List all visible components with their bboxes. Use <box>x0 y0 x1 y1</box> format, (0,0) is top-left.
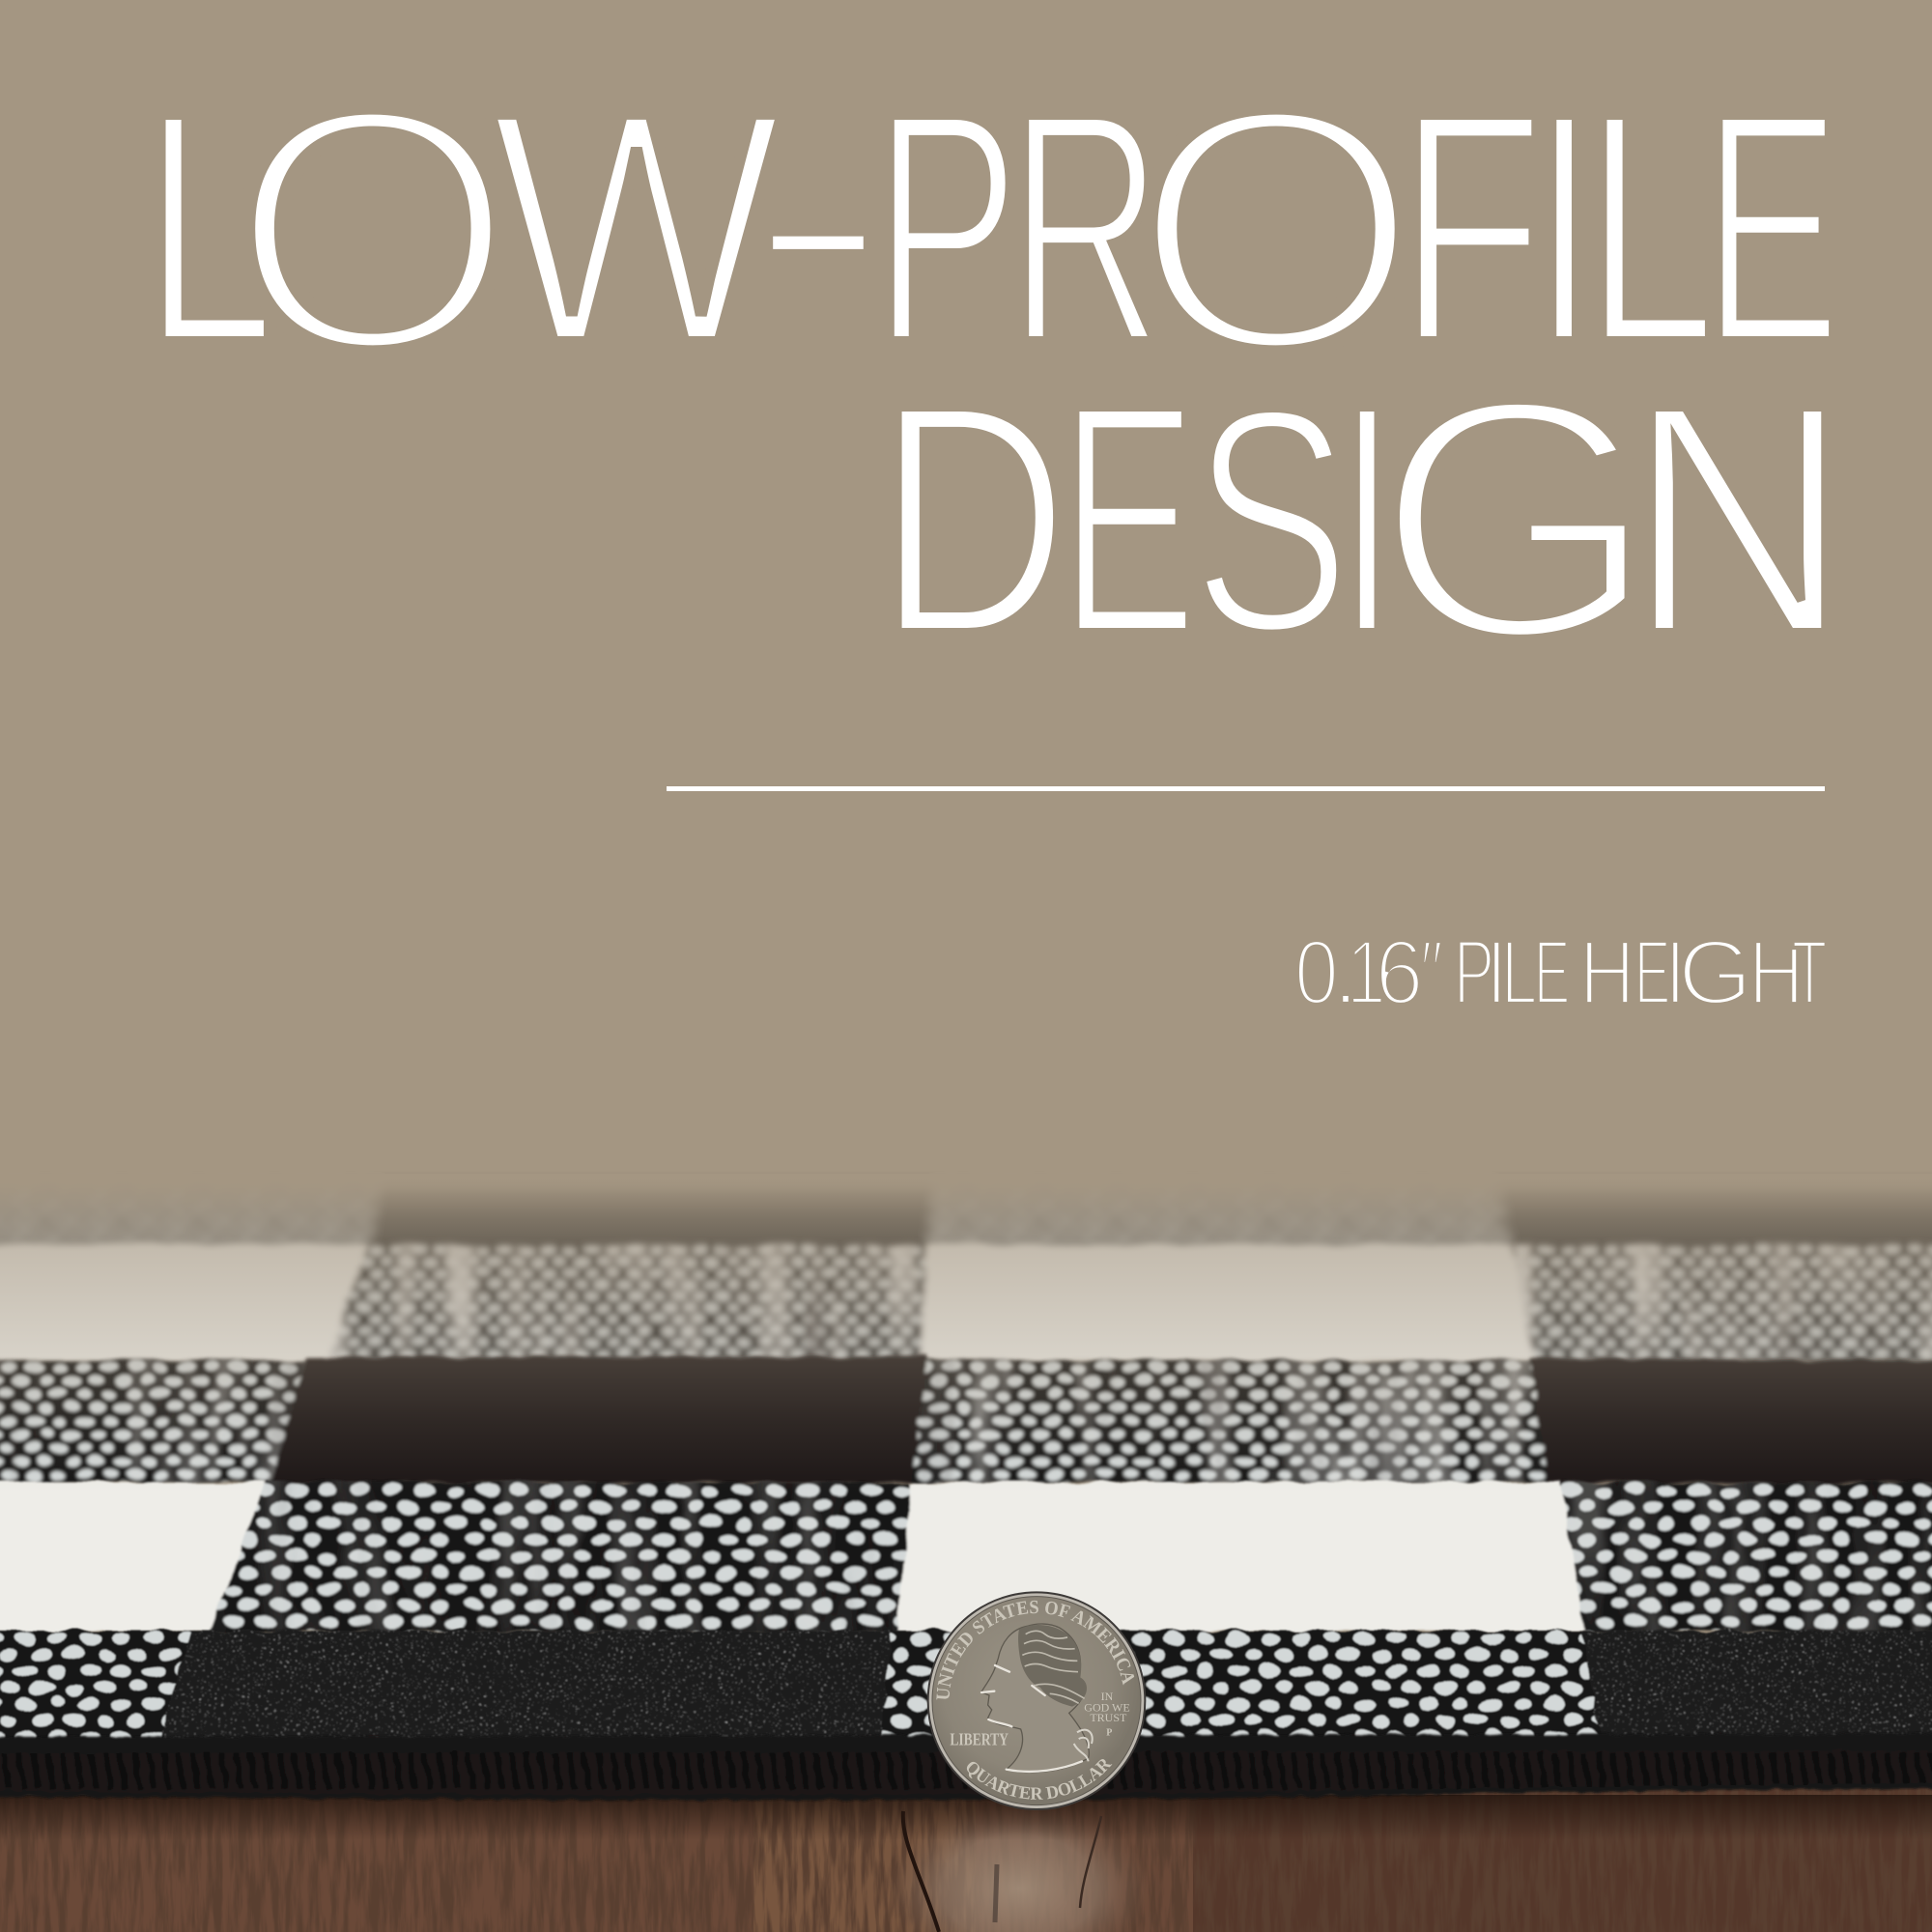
title line one: W <box>489 42 783 412</box>
rug row 3: white and check squares <box>0 1482 1932 1633</box>
subtitle: pile height: . <box>1331 923 1360 1024</box>
title line two: I <box>1337 336 1397 702</box>
rug row 0: far blurred checks <box>0 1184 1932 1256</box>
coin legend: IN <box>1101 1690 1114 1703</box>
coin legend: LIBERTY <box>950 1730 1009 1749</box>
title line one: E <box>1703 44 1840 411</box>
subtitle: pile height: E <box>1634 923 1671 1024</box>
title line two: D <box>876 336 1069 702</box>
title line one: - <box>749 80 888 364</box>
coin legend: P <box>1106 1728 1112 1739</box>
title line one: L <box>143 44 274 411</box>
wood floor <box>0 1777 1932 1932</box>
coin legend <box>936 1600 1134 1800</box>
subtitle: pile height: T <box>1792 923 1828 1024</box>
title line two: S <box>1192 342 1350 698</box>
rug row 2: check and dark squares <box>0 1356 1932 1484</box>
subtitle: pile height: G <box>1678 923 1753 1024</box>
coin legend: TRUST <box>1090 1711 1127 1724</box>
rug row 4: check and dark squares <box>0 1631 1932 1743</box>
title line two <box>876 327 1851 710</box>
title line one: R <box>1009 44 1163 411</box>
subtitle: pile height: H <box>1748 923 1804 1024</box>
haze fading the rug into the background <box>0 1174 1932 1492</box>
divider rule <box>667 786 1825 791</box>
coin legend: QUARTER DOLLAR <box>966 1759 1113 1800</box>
subtitle: pile height: 0 <box>1294 923 1339 1024</box>
title line one <box>143 36 1840 635</box>
coin legend: UNITED STATES OF AMERICA <box>936 1600 1134 1700</box>
title line one: I <box>1532 44 1597 411</box>
subtitle: pile height: ″ <box>1420 923 1443 1024</box>
title line one: L <box>1584 44 1716 411</box>
title line two: N <box>1626 336 1851 702</box>
subtitle: pile height: H <box>1579 923 1634 1024</box>
title line one: P <box>873 44 1020 411</box>
subtitle: pile height: E <box>1534 923 1571 1024</box>
subtitle: pile height <box>1294 923 1828 1024</box>
subtitle: pile height: I <box>1486 923 1507 1024</box>
subtitle: pile height: 6 <box>1376 923 1424 1024</box>
subtitle: pile height: P <box>1454 923 1494 1024</box>
title line one: O <box>1132 36 1421 423</box>
icon: quarter dollar coin <box>927 1591 1146 1810</box>
coin portrait <box>981 1624 1093 1773</box>
title line one: O <box>230 36 516 423</box>
title line two: G <box>1375 327 1659 710</box>
subtitle: pile height: I <box>1664 923 1686 1024</box>
coin legend: GOD WE <box>1084 1700 1130 1714</box>
rug bound edge <box>0 1734 1932 1800</box>
subtitle: pile height: 1 <box>1347 923 1386 1024</box>
subtitle: pile height: L <box>1501 923 1537 1024</box>
title line one: F <box>1398 44 1545 411</box>
title: LOW-PROFILE DESIGN <box>143 36 1851 710</box>
title line two: E <box>1060 336 1197 702</box>
rug row 1: white and check squares <box>0 1244 1932 1364</box>
